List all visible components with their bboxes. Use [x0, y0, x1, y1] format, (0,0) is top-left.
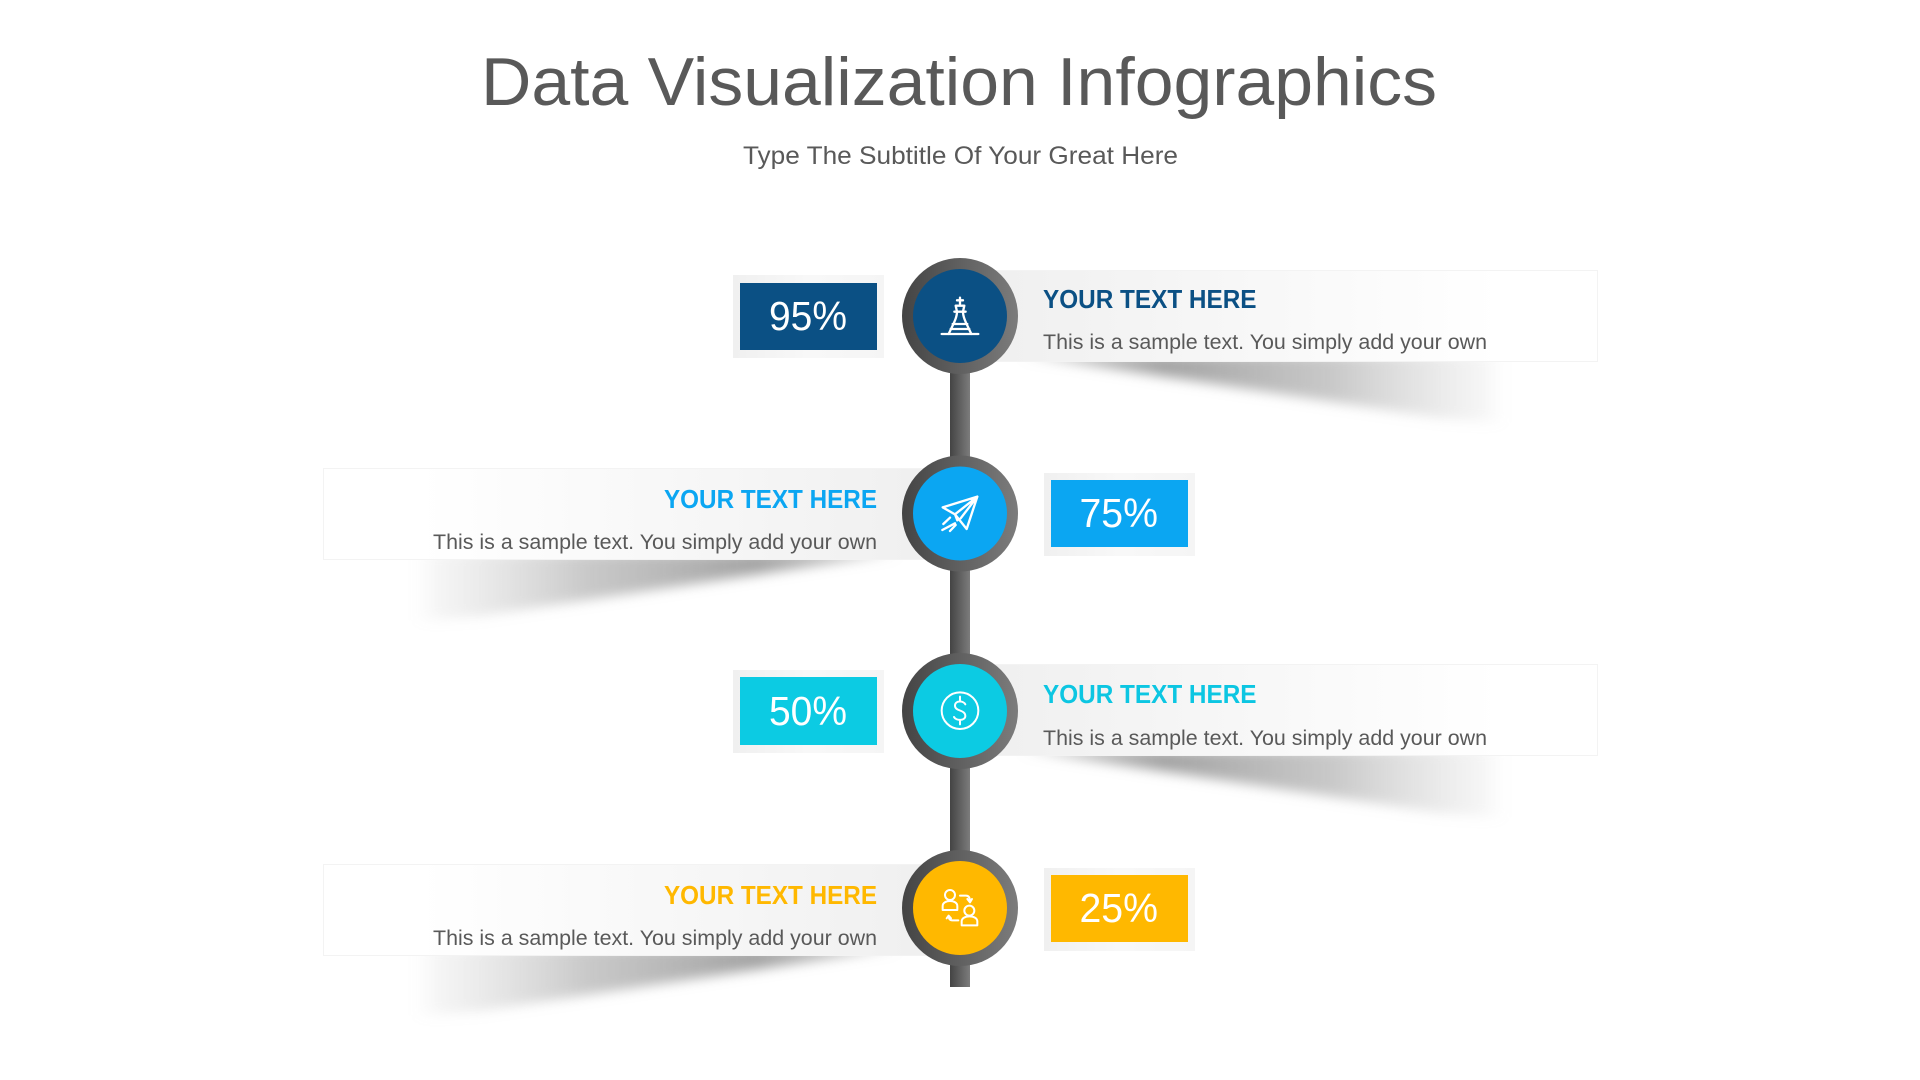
step 4: 25% [324, 850, 1195, 1016]
percentage box: 95% [769, 293, 847, 339]
title: Data Visualization Infographics [481, 44, 1437, 120]
description: This is a sample text. You simply add your own [433, 531, 877, 554]
card shadow [417, 553, 899, 621]
card shadow [1021, 750, 1504, 818]
icon: dollar coin [942, 692, 978, 729]
percentage box: 75% [1080, 490, 1158, 536]
description: This is a sample text. You simply add your own [1043, 727, 1487, 750]
icon: paper plane [942, 497, 977, 531]
description: This is a sample text. You simply add your own [1043, 331, 1487, 354]
ring [902, 850, 1018, 966]
description: This is a sample text. You simply add your own [433, 927, 877, 950]
ring [902, 456, 1018, 572]
timeline vertical bar [950, 316, 970, 987]
icon: chess piece [942, 298, 978, 334]
percentage box [1044, 473, 1195, 556]
percentage box: 25% [1080, 885, 1158, 931]
circle [913, 269, 1007, 363]
percentage box [733, 275, 884, 358]
step 3: 50% [733, 653, 1598, 818]
ring [902, 653, 1018, 769]
circle [913, 466, 1007, 560]
icon: people exchange [943, 890, 977, 925]
percentage box [733, 670, 884, 753]
card shadow [417, 948, 899, 1016]
step 2: 75% [324, 456, 1195, 621]
heading: YOUR TEXT HERE [664, 880, 877, 910]
text card [960, 270, 1598, 362]
heading: YOUR TEXT HERE [1043, 679, 1256, 709]
step 1: 95% [733, 258, 1598, 423]
text card [324, 468, 960, 560]
circle [913, 664, 1007, 758]
circle [913, 861, 1007, 955]
percentage box [1044, 868, 1195, 951]
card shadow [1021, 355, 1504, 423]
subtitle: Type The Subtitle Of Your Great Here [743, 142, 1178, 170]
heading: YOUR TEXT HERE [1043, 284, 1256, 314]
percentage box: 50% [769, 688, 847, 734]
ring [902, 258, 1018, 374]
text card [960, 664, 1598, 756]
heading: YOUR TEXT HERE [664, 484, 877, 514]
text card [324, 864, 960, 956]
